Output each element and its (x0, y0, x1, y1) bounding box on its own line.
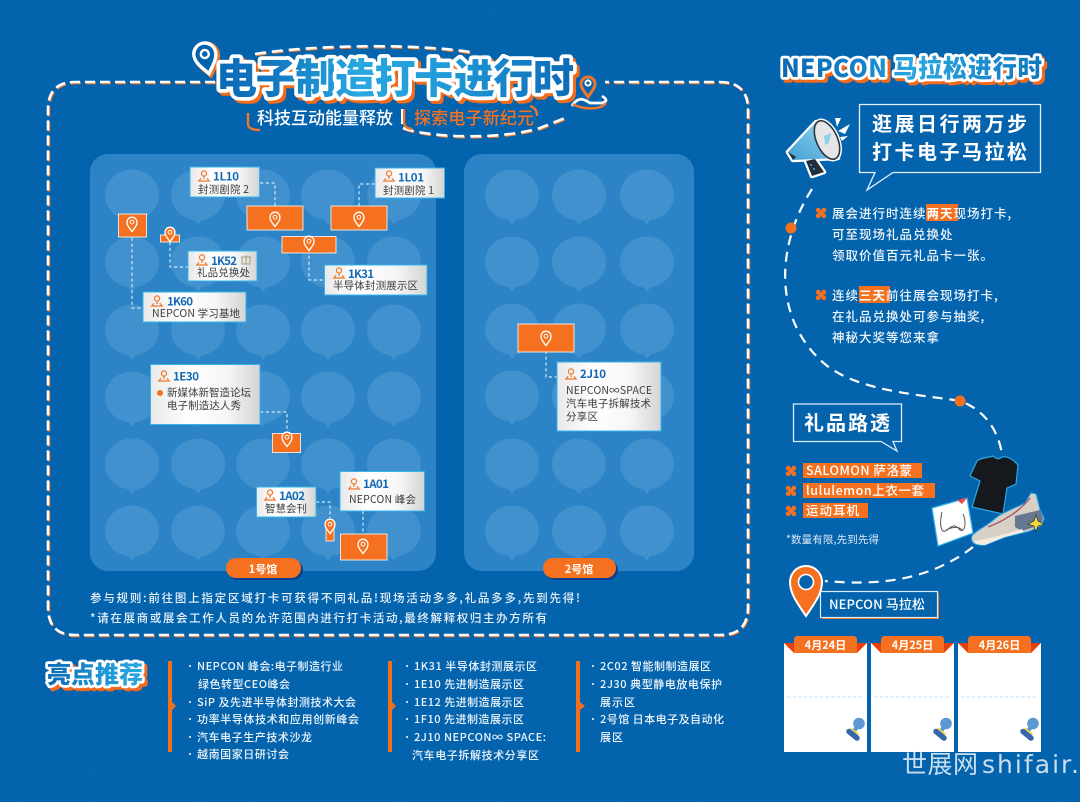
title: 电子制造打卡进行时 (216, 45, 574, 105)
participation rules: 参与规则:前往图上指定区域打卡可获得不同礼品!现场活动多多,礼品多多,先到先得! (90, 590, 580, 606)
highlights column 2: 2J10 NEPCON∞ SPACE: (414, 729, 546, 745)
location 1A02: 智慧会刊 (265, 501, 307, 516)
location 1A01: NEPCON 峰会 (349, 492, 416, 507)
rule text: three days: 神秘大奖等您来拿 (832, 327, 940, 346)
location 1K31: 半导体封测展示区 (333, 278, 418, 293)
highlights column 2 (388, 658, 546, 763)
speech box: gifts: 礼品路透 (804, 407, 890, 436)
highlights heading: 亮点推荐 (47, 655, 143, 690)
gift list: 运动耳机 (806, 500, 859, 519)
location 2J10: 2J10 (580, 366, 606, 382)
highlights column 2: 汽车电子拆解技术分享区 (412, 747, 539, 763)
rule text: two days: 展会进行时连续两天现场打卡, (832, 203, 1012, 222)
location 1L01: 1L01 (398, 170, 424, 186)
location 1K31 (282, 236, 427, 295)
location 2J10: NEPCON∞SPACE (566, 383, 652, 398)
gift list: SALOMON 萨洛蒙 (806, 460, 912, 479)
subtitle (257, 104, 534, 129)
highlights column 1 (168, 658, 359, 762)
location 1E30 (150, 364, 300, 452)
hall 2 tag (543, 558, 618, 580)
icon: gift (241, 255, 251, 264)
highlights column 3: 2C02 智能制制造展区 (600, 658, 711, 674)
check-in card: April 25 (871, 636, 954, 752)
location 1A02: 1A02 (279, 488, 305, 504)
location 1K60 (118, 214, 246, 322)
location 1E30: 电子制造达人秀 (167, 398, 242, 413)
route markers (786, 222, 966, 406)
highlights column 1: NEPCON 峰会:电子制造行业 (197, 658, 343, 674)
location 1K52: 礼品兑换处 (197, 265, 250, 280)
note: limited quantity: *数量有限,先到先得 (786, 532, 879, 547)
highlights column 1: 绿色转型CEO峰会 (198, 676, 290, 692)
marathon heading: NEPCON 马拉松进行时 (781, 50, 1042, 85)
participation rules: *请在展商或展会工作人员的允许范围内进行打卡活动,最终解释权归主办方所有 (90, 610, 547, 626)
panel: hall 1 map (90, 154, 436, 571)
check-in card: April 25: 4月25日 (892, 637, 933, 653)
rule text: two days (816, 203, 1012, 264)
rule text: two days: 可至现场礼品兑换处 (832, 224, 954, 243)
location 1E30: 1E30 (173, 368, 199, 384)
location 1E30: 新媒体新智造论坛 (167, 385, 252, 400)
highlights column 1: 越南国家日研讨会 (197, 746, 289, 762)
hall 2 tag: 2号馆 (565, 561, 593, 577)
gift list (786, 460, 935, 519)
location 1L10: 1L10 (213, 168, 239, 184)
highlights column 3: 2J30 典型静电放电保护 (600, 676, 722, 692)
highlights column 2: 1F10 先进制造展示区 (414, 711, 524, 727)
location 1K60: NEPCON 学习基地 (152, 306, 240, 321)
icon: sneaker (972, 493, 1044, 545)
title dashed oval (248, 46, 566, 137)
rule text: three days: 在礼品兑换处可参与抽奖, (832, 306, 985, 325)
location 2J10: 分享区 (566, 409, 598, 424)
highlights column 3 (576, 658, 724, 752)
icon: earphones card (932, 498, 973, 546)
location 1L10 (190, 167, 303, 230)
speech box: gifts (794, 404, 902, 451)
icon: title end pin (572, 77, 606, 108)
rule text: three days (816, 285, 999, 346)
speech box: walking goal: 逛展日行两万步 (872, 108, 1027, 137)
watermark: 世展网 (902, 745, 978, 781)
watermark: shifair. (982, 750, 1079, 779)
watermark (902, 745, 1079, 781)
location 2J10 (518, 324, 661, 431)
location 1L10: 封测剧院 2 (198, 182, 249, 197)
icon: megaphone (788, 117, 850, 176)
check-in card: April 24: 4月24日 (805, 637, 846, 653)
panel: hall 2 map (464, 154, 694, 571)
check-in card: April 26: 4月26日 (979, 637, 1020, 653)
location 1K60: 1K60 (167, 294, 193, 310)
hall 1 tag: 1号馆 (249, 561, 277, 577)
icon: title location pin (192, 41, 221, 77)
speech box: walking goal: 打卡电子马拉松 (872, 136, 1027, 165)
location 1K52: 1K52 (211, 253, 237, 269)
highlights column 2: 1E12 先进制造展示区 (414, 694, 524, 710)
rule text: two days: 领取价值百元礼品卡一张。 (832, 245, 994, 264)
location 1A02 (256, 487, 335, 541)
location 1L01 (331, 168, 444, 230)
highlights column 1: 汽车电子生产技术沙龙 (197, 729, 312, 745)
highlights column 1: 功率半导体技术和应用创新峰会 (197, 711, 359, 727)
dashed frame (48, 82, 749, 636)
check-in card: April 26 (958, 636, 1041, 752)
highlights column 1: SiP 及先进半导体封测技术大会 (197, 694, 356, 710)
highlights column 3: 展示区 (600, 694, 635, 710)
location 1L01: 封测剧院 1 (383, 183, 434, 198)
location 1A01 (340, 472, 424, 560)
location 1K31: 1K31 (348, 266, 374, 282)
icon: black t-shirt (970, 456, 1018, 514)
location 1A01: 1A01 (363, 476, 389, 492)
marathon tag with pin (790, 566, 939, 619)
speech box: walking goal (860, 104, 1040, 190)
hall 1 tag (226, 558, 303, 580)
subtitle: 科技互动能量释放 (257, 104, 393, 129)
participation rules (90, 590, 580, 626)
highlights column 3: 展区 (600, 729, 623, 745)
subtitle: 探索电子新纪元 (414, 104, 534, 129)
highlights column 2: 1E10 先进制造展示区 (414, 676, 524, 692)
check-in card: April 24 (784, 636, 867, 752)
highlights column 3: 2号馆 日本电子及自动化 (600, 711, 724, 727)
location 2J10: 汽车电子拆解技术 (566, 396, 652, 411)
marathon route dashed line (785, 189, 1002, 583)
rule text: three days: 连续三天前往展会现场打卡, (832, 285, 999, 304)
highlights column 2: 1K31 半导体封测展示区 (414, 658, 537, 674)
gift list: lululemon上衣一套 (806, 480, 924, 499)
marathon tag with pin: NEPCON 马拉松 (829, 594, 925, 613)
location 1K52 (160, 227, 257, 281)
